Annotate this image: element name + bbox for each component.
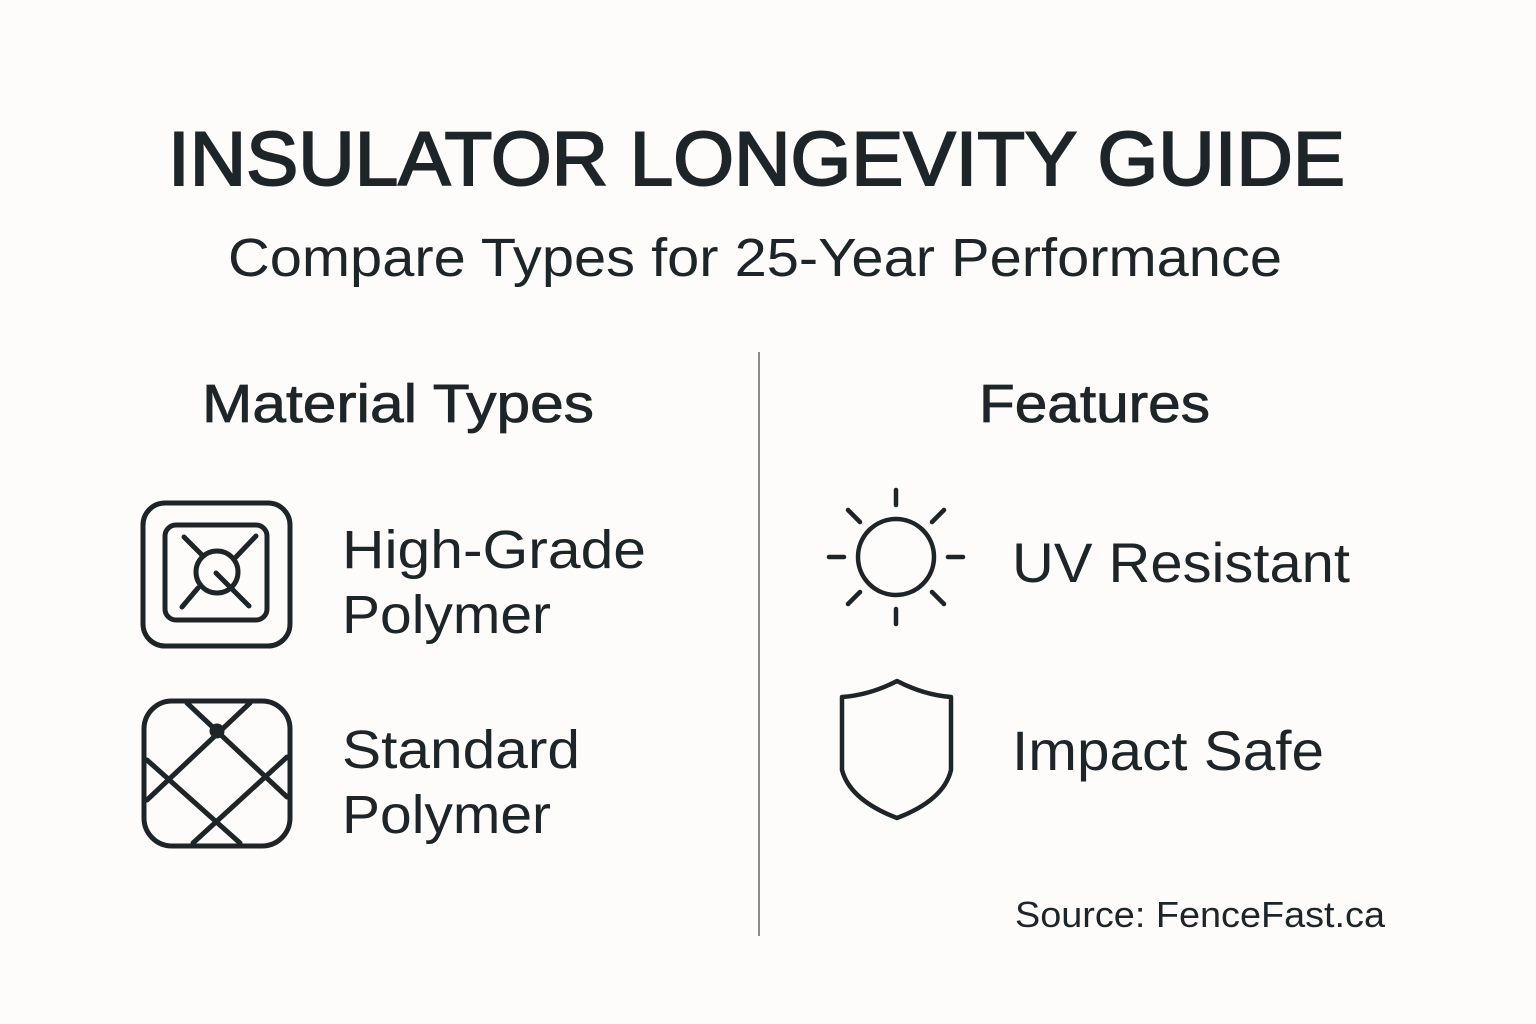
- heading: Features: Features: [979, 374, 1210, 434]
- subtitle: Compare Types for 25-Year Performance: [228, 228, 1282, 288]
- icon: sun: [829, 490, 963, 624]
- icon: shield: [842, 681, 951, 818]
- label: High-Grade Polymer: [342, 520, 646, 645]
- source: Source: FenceFast.ca: [1015, 894, 1386, 935]
- title: INSULATOR LONGEVITY GUIDE: [168, 117, 1345, 202]
- label: Impact Safe: Impact Safe: [1012, 719, 1324, 782]
- label: UV Resistant: UV Resistant: [1012, 531, 1350, 594]
- heading: Material Types: Material Types: [202, 374, 594, 434]
- label: Standard Polymer: [342, 720, 580, 845]
- label: High-Grade Polymer: High-Grade: [342, 520, 646, 580]
- icon: standard polymer: [144, 701, 290, 846]
- icon: high-grade polymer: [143, 503, 290, 646]
- label: Standard Polymer: Standard: [342, 720, 580, 780]
- label: High-Grade Polymer: Polymer: [342, 585, 551, 645]
- label: Standard Polymer: Polymer: [342, 785, 551, 845]
